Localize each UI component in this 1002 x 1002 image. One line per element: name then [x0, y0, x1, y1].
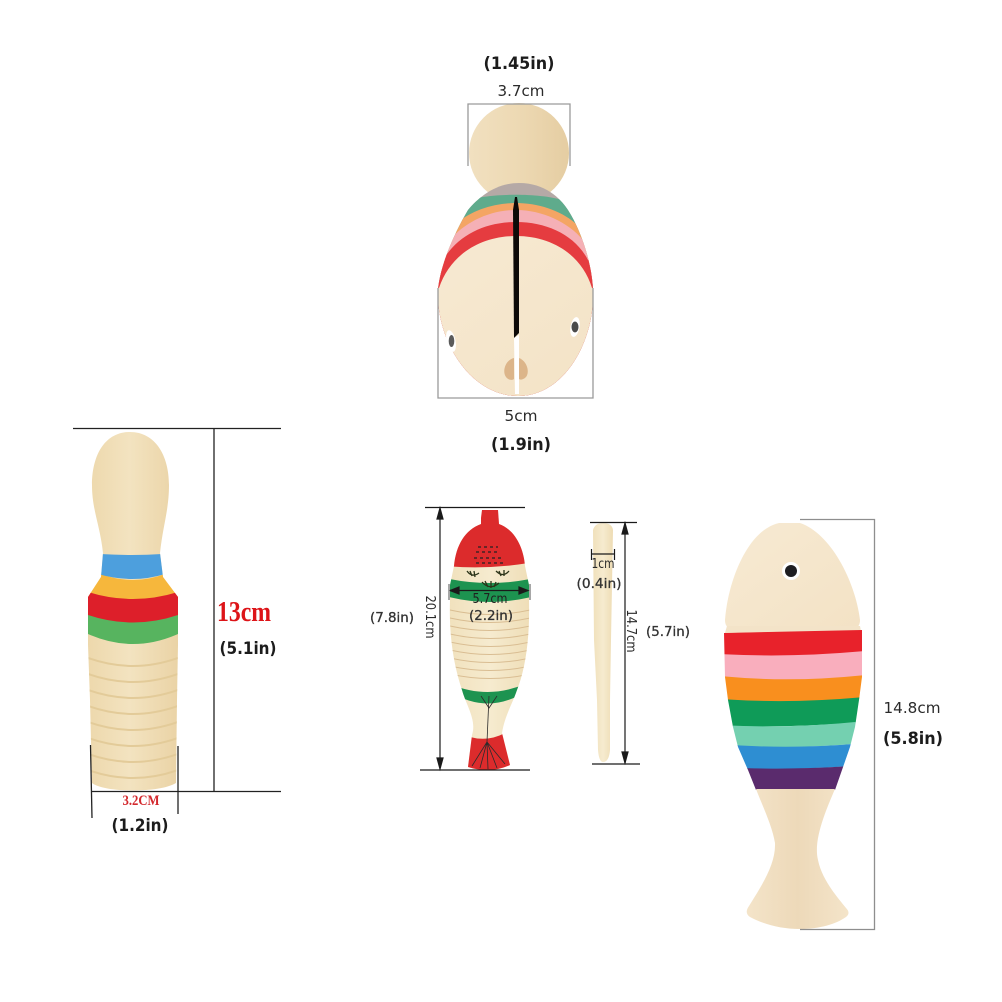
label: top fish body cm: 5cm	[504, 407, 538, 425]
width ticks	[449, 584, 530, 600]
neck	[724, 626, 862, 636]
instrument: top fish view	[438, 103, 593, 396]
instrument: bowling pin guiro	[88, 432, 178, 790]
label: stick width inches: (0.4in)	[576, 577, 622, 592]
label: pin width inches: (1.2in)	[112, 816, 168, 836]
sound hole	[504, 358, 514, 380]
label: stick width cm: 1cm	[592, 557, 614, 572]
slit	[513, 197, 519, 338]
label: painted fish width inches: (2.2in)	[469, 609, 513, 624]
head	[725, 523, 860, 628]
scales	[474, 547, 505, 563]
label: stick length inches: (5.7in)	[646, 625, 690, 640]
dimension lines: bowling pin	[73, 428, 281, 818]
instrument: wooden stick	[593, 523, 613, 762]
red head	[454, 510, 525, 568]
instrument: rainbow fish	[720, 523, 865, 929]
label: painted fish width cm: 5.7cm	[472, 592, 508, 607]
dimension lines: rainbow fish	[800, 520, 874, 930]
green tail band	[461, 686, 518, 704]
tail stem	[747, 789, 848, 929]
dimension lines: top fish	[438, 104, 593, 398]
red tail	[468, 734, 510, 770]
label: top fish head cm: 3.7cm	[498, 82, 544, 100]
label: painted fish height inches: (7.8in)	[370, 611, 414, 626]
green collar	[450, 579, 529, 602]
label: rainbow fish cm: 14.8cm	[884, 699, 940, 717]
tail lines	[472, 696, 505, 769]
label: rainbow fish inches: (5.8in)	[883, 729, 943, 749]
label: pin height inches: (5.1in)	[220, 639, 276, 659]
label: top fish head inches: (1.45in)	[484, 54, 554, 74]
eyelashes	[467, 570, 509, 588]
eye: rainbow fish	[782, 562, 800, 580]
label: painted fish height cm: 20.1cm	[422, 596, 437, 638]
eyes	[444, 329, 458, 353]
label: stick length cm: 14.7cm	[623, 610, 638, 652]
label: top fish body inches: (1.9in)	[491, 435, 551, 455]
ribs	[450, 610, 530, 678]
dimension lines: painted fish and stick	[420, 508, 640, 770]
instrument: painted fish guiro	[450, 510, 530, 770]
striped body	[720, 629, 865, 792]
grooves	[88, 658, 178, 778]
label: pin width cm: 3.2CM	[122, 793, 160, 809]
label: pin height cm: 13cm	[217, 597, 271, 628]
